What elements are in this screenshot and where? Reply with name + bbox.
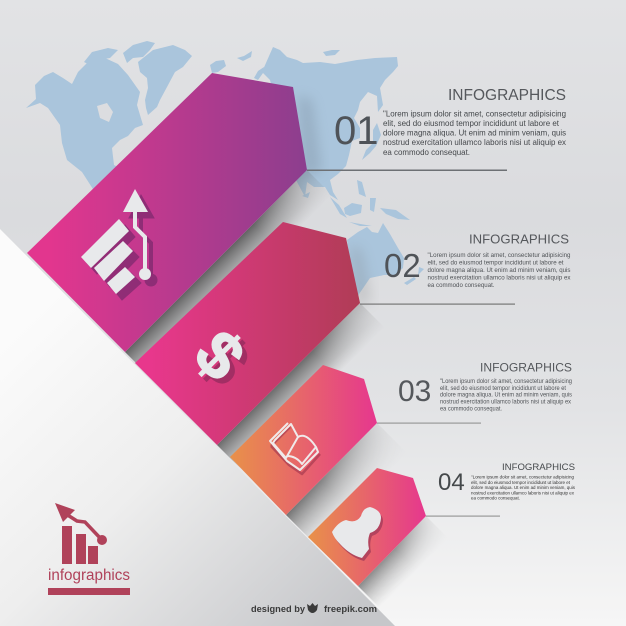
body 01: dolore magna aliqua. Ut enim ad minim veniam, quis <box>383 128 566 138</box>
body 02: "Lorem ipsum dolor sit amet, consectetur adipisicing <box>428 252 571 259</box>
heading 03: INFOGRAPHICS <box>480 360 572 374</box>
map: New Siberian islands <box>323 50 340 56</box>
leader lines <box>307 170 515 517</box>
icon: person silhouette <box>332 507 383 561</box>
body 01: ea commodo consequat. <box>383 147 470 157</box>
map: New Zealand <box>379 267 424 285</box>
body 02: dolore magna aliqua. Ut enim ad minim veniam, quis <box>428 267 571 274</box>
icon: dollar sign: $ <box>186 321 264 399</box>
map: Novaya Zemlya <box>254 67 264 80</box>
number 03: 03 <box>398 375 431 408</box>
text block 01 <box>334 87 567 157</box>
logo: infographics <box>48 503 130 595</box>
map: Greenland <box>138 45 192 115</box>
shadows cast by the arrows <box>125 95 448 608</box>
icon: bar chart with arrow <box>81 189 157 300</box>
body 03: "Lorem ipsum dolor sit amet, consectetur adipisicing <box>440 378 572 385</box>
map: Baffin and arctic islands <box>84 41 155 66</box>
map: Svalbard <box>237 51 252 61</box>
icon: freepik crown <box>307 603 318 613</box>
body 04 <box>471 474 575 502</box>
body 02 <box>428 252 571 289</box>
number 02: 02 <box>384 247 421 284</box>
number 04: 04 <box>438 469 465 496</box>
body 02: elit, sed do eiusmod tempor incididunt ut labore et <box>428 260 564 266</box>
body 01: "Lorem ipsum dolor sit amet, consectetur adipisicing <box>383 108 566 118</box>
body 03: ea commodo consequat. <box>440 406 502 412</box>
body 03: elit, sed do eiusmod tempor incididunt ut labore et <box>440 385 566 392</box>
map: Japan <box>362 123 381 160</box>
map: Australia <box>347 223 404 300</box>
credit: freepik.com <box>324 604 377 615</box>
body 01 <box>383 108 567 157</box>
credit <box>251 603 377 615</box>
arrow panel 4 <box>308 468 426 586</box>
logo bar <box>48 588 130 595</box>
body 01: nostrud exercitation ullamco laboris nisi ut aliquip ex <box>383 137 567 147</box>
icon: open book <box>270 423 320 474</box>
body 04: "Lorem ipsum dolor sit amet, consectetur adipisicing <box>471 474 574 480</box>
map: North America <box>26 58 143 200</box>
logo wordmark: infographics <box>48 567 130 584</box>
body 04: ea commodo consequat. <box>471 496 520 502</box>
body 03 <box>440 378 572 412</box>
map: Eurasia <box>262 47 398 200</box>
arrow panel 1 <box>27 73 307 352</box>
text block 03 <box>398 360 572 412</box>
body 02: ea commodo consequat. <box>428 282 495 289</box>
body 03: dolore magna aliqua. Ut enim ad minim veniam, quis <box>440 392 572 398</box>
map: Indonesia and Philippines <box>302 180 410 226</box>
world map <box>26 41 424 300</box>
heading 01: INFOGRAPHICS <box>448 87 566 104</box>
logo chart icon <box>55 503 107 564</box>
credit: designed by <box>251 604 305 614</box>
body 04: dolore magna aliqua. Ut enim ad minim veniam, quis <box>471 485 575 491</box>
map: Iceland <box>210 60 226 73</box>
heading 04: INFOGRAPHICS <box>502 462 575 473</box>
lower left white panel <box>0 229 395 626</box>
body 01: elit, sed do eiusmod tempor incididunt ut labore et <box>383 118 560 128</box>
body 02: nostrud exercitation ullamco laboris nisi ut aliquip ex <box>428 274 571 282</box>
number 01: 01 <box>334 109 378 153</box>
arrow panel 2 <box>135 222 360 445</box>
world map: Hudson Bay <box>97 103 113 122</box>
arrow panel 3 <box>230 365 377 515</box>
body 04: nostrud exercitation ullamco laboris nisi ut aliquip ex <box>471 490 574 496</box>
text block 02 <box>384 232 571 289</box>
text block 04 <box>438 462 575 502</box>
body 04: elit, sed do eiusmod tempor incididunt ut labore et <box>471 480 571 486</box>
heading 02: INFOGRAPHICS <box>469 232 569 246</box>
icon: dollar sign: $ <box>181 316 259 394</box>
body 03: nostrud exercitation ullamco laboris nisi ut aliquip ex <box>440 398 572 406</box>
